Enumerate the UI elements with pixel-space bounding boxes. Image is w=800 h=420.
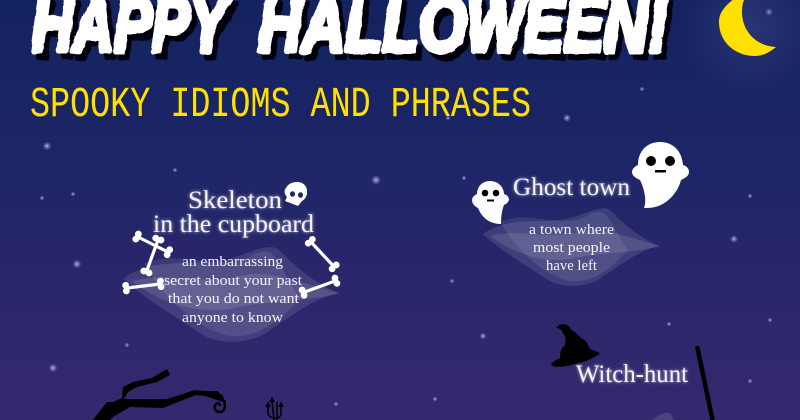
panel: skeleton in the cupboard [122,182,341,342]
heading: witch-hunt: Witch-hunt [576,361,688,388]
text: ghost definition: a town where [529,222,614,238]
text: ghost definition: have left [546,258,598,274]
icon: small ghost [472,181,509,224]
text: ghost definition [529,222,614,274]
text: skeleton definition [164,254,303,326]
title [32,0,673,74]
illustration: bare tree branch [93,369,225,420]
text: ghost definition: most people [533,240,610,256]
text: skeleton definition: secret about your past [164,273,303,289]
text: skeleton definition: an embarrassing [182,254,284,270]
heading: ghost town: Ghost town [513,174,630,201]
wisp: witch cloud top [652,413,674,420]
panel: ghost town [472,142,689,286]
text: skeleton definition: that you do not want [168,291,300,307]
icon: witch hat [551,324,600,367]
text: skeleton definition: anyone to know [182,310,283,326]
icon: broomstick [698,348,713,420]
wisp: skeleton cloud [123,247,339,342]
heading: skeleton [153,187,315,238]
icon: large ghost [632,142,689,208]
icon: skull [285,182,307,206]
icon: crescent moon [678,0,800,97]
icon: trident [266,398,283,420]
heading: skeleton: in the cupboard [153,211,315,238]
subtitle: SPOOKY IDIOMS AND PHRASES [30,80,531,129]
panel: witch-hunt [551,324,713,420]
heading: skeleton: Skeleton [188,187,283,214]
icon: bones [122,229,341,300]
wisp: ghost cloud [483,208,660,286]
